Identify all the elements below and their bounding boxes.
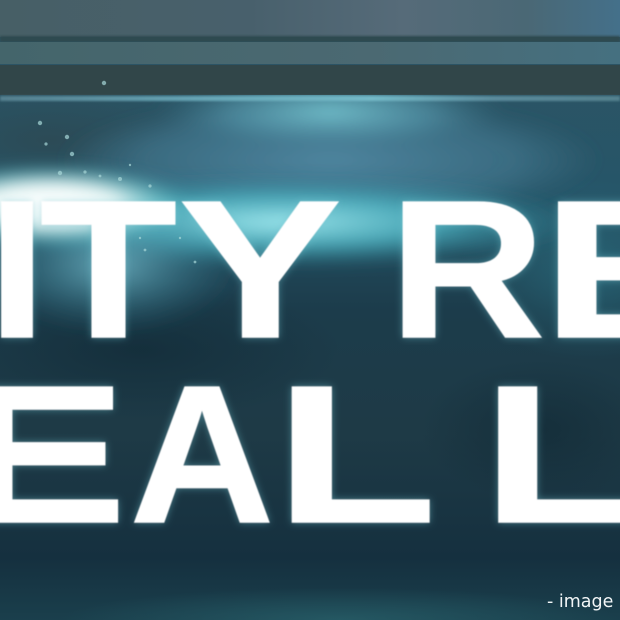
headline: line 2: L: [482, 345, 620, 564]
headline: line 1: R: [389, 160, 545, 379]
light streak and flare: [0, 163, 590, 335]
headline: line 1: T: [40, 160, 177, 379]
horizontal light rule: [0, 96, 620, 101]
particles: [38, 81, 196, 263]
light glow under the rule: [60, 74, 600, 222]
headline: line 1: Y: [179, 160, 338, 379]
caption: - image: [547, 592, 613, 612]
header bands: [0, 0, 620, 95]
headline: line 2: A: [130, 345, 274, 564]
headline: line 2: L: [275, 345, 432, 564]
